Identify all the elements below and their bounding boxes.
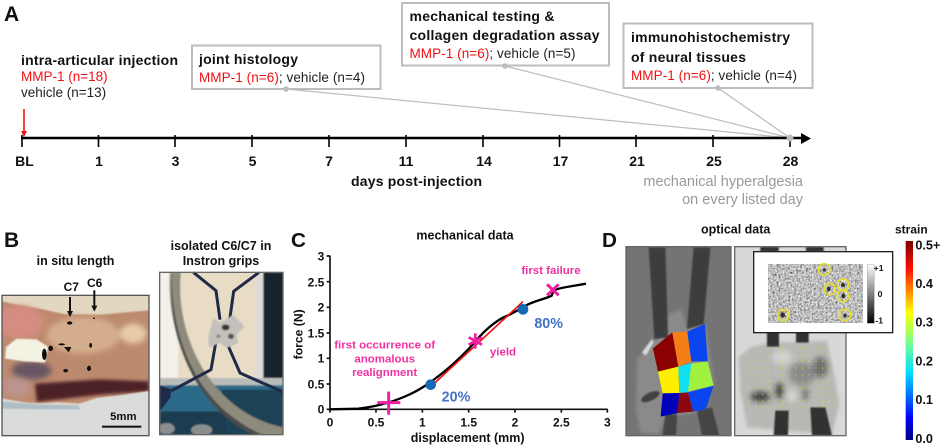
timeline day labels: BL (15, 153, 34, 169)
y axis numbers: 1 (318, 352, 325, 366)
y axis title: force (N) (291, 309, 305, 359)
strain colour bar: strain (895, 222, 928, 236)
timeline day labels: 21 (629, 153, 645, 169)
y axis numbers (308, 249, 325, 417)
isolated C6/C7 heading: isolated C6/C7 in (171, 239, 271, 253)
inset greyscale bar: +1 (874, 263, 884, 273)
x axis numbers: 0 (327, 415, 334, 429)
box: joint histology (192, 46, 380, 89)
magenta annotations (334, 265, 581, 379)
timeline day labels: 11 (399, 153, 414, 169)
y axis numbers: 1.5 (308, 327, 325, 341)
inset greyscale bar (867, 263, 884, 325)
panel A: study timeline (4, 3, 812, 208)
C7 and C6 labels with arrows: C7 (64, 280, 79, 294)
tissue sample (208, 315, 244, 348)
dark defect spots (780, 268, 847, 318)
red linear fit (431, 302, 523, 386)
mechanical hyperalgesia note (643, 174, 804, 208)
in situ length heading: in situ length (37, 254, 114, 268)
right camera image (735, 247, 846, 436)
C7 and C6 labels with arrows: C6 (87, 276, 103, 290)
panel C: force-displacement chart (291, 228, 611, 445)
magenta annotations: first failure (521, 265, 581, 277)
mechanical hyperalgesia note: mechanical hyperalgesia (643, 174, 804, 190)
mechanical data heading: mechanical data (416, 228, 515, 242)
intra-articular injection text: vehicle (n=13) (21, 85, 106, 100)
strain colour bar: 0.1 (915, 393, 933, 407)
x axis numbers: 3 (604, 415, 611, 429)
magenta markers (377, 284, 559, 415)
box: immunohistochemistry of neural tissues: of neural tissues (631, 49, 746, 65)
mechanical hyperalgesia note: on every listed day (682, 192, 804, 208)
inset: speckle strain map (754, 252, 893, 333)
blue percentage labels: 20% (442, 390, 471, 406)
strain colour bar: 0.0 (915, 432, 933, 446)
connector lines to day 28 (286, 66, 790, 138)
x axis numbers: 2.5 (553, 415, 570, 429)
x axis title: displacement (mm) (411, 431, 525, 445)
box: joint histology: MMP-1 (n=6); vehicle (n=4) (199, 70, 365, 85)
strain colour bar (895, 222, 940, 446)
timeline day labels: 17 (553, 153, 568, 169)
strain colour bar: 0.5+ (915, 238, 940, 252)
y axis numbers: 3 (318, 249, 325, 263)
y axis numbers: 2.5 (308, 275, 325, 289)
intra-articular injection text (21, 52, 178, 100)
isolated C6/C7 heading (171, 239, 271, 268)
timeline day labels: 14 (476, 153, 492, 169)
axis title: days post-injection (351, 173, 482, 189)
timeline axis with ticks (21, 133, 811, 147)
strain colour bar: 0.4 (915, 277, 933, 291)
magenta annotations: first occurrence of (334, 339, 435, 351)
x axis numbers: 2 (512, 415, 519, 429)
y axis numbers: 2 (318, 301, 325, 315)
optical data heading: optical data (701, 222, 771, 236)
magenta annotations: yield (490, 346, 516, 358)
force curve (330, 284, 586, 409)
scale bar and 5mm label: 5mm (110, 411, 137, 423)
y axis numbers: 0.5 (308, 378, 325, 392)
box: joint histology: joint histology (198, 51, 298, 67)
x axis numbers: 1.5 (460, 415, 477, 429)
timeline day labels: 28 (783, 153, 798, 169)
magenta annotations: realignment (352, 367, 417, 379)
panel D: optical data (602, 222, 940, 446)
magenta annotations: anomalous (354, 353, 415, 365)
x axis numbers: 0.5 (368, 415, 385, 429)
inset greyscale bar: -1 (875, 315, 883, 325)
panel label D: D (602, 229, 617, 252)
yellow circled defects (778, 264, 851, 321)
strain colour bar: 0.2 (915, 354, 933, 368)
strain colour patches (653, 324, 714, 417)
metal grips (172, 272, 283, 392)
panel label B: B (4, 229, 19, 252)
timeline day labels: 25 (706, 153, 722, 169)
yellow tracking dots (749, 348, 838, 407)
intra-articular injection text: MMP-1 (n=18) (21, 69, 108, 84)
scale bar and 5mm label (102, 411, 141, 428)
isolated C6/C7 heading: Instron grips (183, 254, 259, 268)
box: mechanical testing and collagen degradation assay: mechanical testing & (410, 8, 554, 24)
intra-articular injection text: intra-articular injection (21, 52, 178, 68)
timeline day labels: 3 (172, 153, 180, 169)
x axis numbers: 1 (419, 415, 426, 429)
panel B: photographs (0, 229, 283, 436)
box: mechanical testing and collagen degradation assay: MMP-1 (n=6); vehicle (n=5) (410, 46, 576, 61)
panel label A: A (4, 3, 19, 26)
panel label C: C (291, 229, 306, 252)
blue 20% and 80% points (425, 304, 528, 390)
strain colour bar: 0.3 (915, 316, 933, 330)
box: immunohistochemistry of neural tissues: immunohistochemistry (631, 29, 790, 45)
chart axes and ticks (327, 256, 608, 413)
timeline day labels: 7 (325, 153, 333, 169)
timeline day labels: 1 (95, 153, 103, 169)
C7 and C6 labels with arrows (64, 276, 103, 317)
inset greyscale bar: 0 (878, 289, 883, 299)
left camera image (626, 247, 731, 436)
box: immunohistochemistry of neural tissues (624, 24, 812, 88)
speckle noise image (768, 264, 863, 323)
box: mechanical testing and collagen degradation assay (402, 3, 609, 66)
tissue marker dots (42, 318, 95, 372)
blue percentage labels: 80% (534, 316, 563, 332)
x axis numbers (327, 415, 611, 429)
box: mechanical testing and collagen degradation assay: collagen degradation assay (410, 27, 600, 43)
photo: Instron grips (159, 272, 283, 436)
photo: in situ tissue (0, 295, 150, 436)
y axis numbers: 0 (318, 403, 325, 417)
blue percentage labels (442, 316, 563, 406)
box: immunohistochemistry of neural tissues: MMP-1 (n=6); vehicle (n=4) (631, 68, 797, 83)
connector end dots (283, 63, 721, 92)
red injection arrow (21, 109, 27, 137)
timeline day labels: 5 (249, 153, 257, 169)
timeline day labels (15, 153, 798, 169)
